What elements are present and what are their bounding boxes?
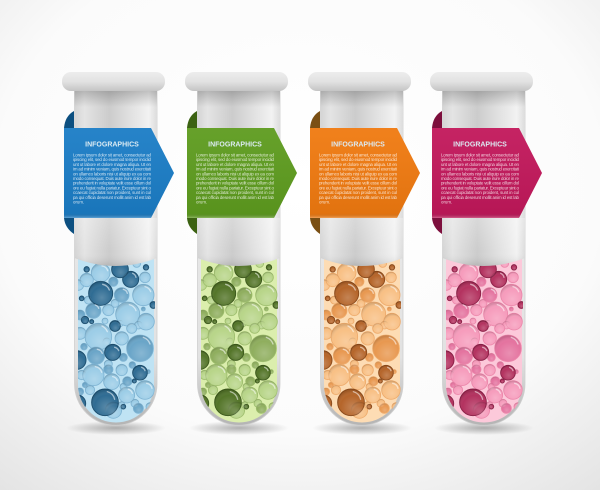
blue ribbon fold — [64, 111, 74, 234]
orange arrow ribbon — [310, 128, 420, 218]
blue body text: prehenderit in voluptate velit esse cillum dol — [73, 181, 151, 186]
panel: blue test tube — [62, 72, 174, 435]
magenta body text: unt ut labore et dolore magna aliqua. Ut en — [441, 162, 520, 167]
magenta body text: on ullamco laboris nisi ut aliquip ex ea com — [441, 171, 519, 176]
blue heading: INFOGRAPHICS — [85, 142, 139, 148]
green body text: im ad minim veniam, quis nostrud exercitati — [196, 167, 274, 172]
orange body text: orum. — [319, 200, 330, 204]
blue arrow ribbon — [64, 128, 174, 218]
orange body text: pa qui officia deserunt mollit anim id est lab — [319, 195, 398, 200]
magenta body text: ore eu fugiat nulla pariatur. Excepteur sint o — [441, 185, 520, 190]
magenta ribbon fold — [432, 111, 442, 234]
orange heading: INFOGRAPHICS — [331, 142, 385, 148]
orange body text: prehenderit in voluptate velit esse cillum dol — [319, 181, 397, 186]
green body text: ore eu fugiat nulla pariatur. Excepteur sint o — [196, 185, 275, 190]
magenta body text: prehenderit in voluptate velit esse cillum dol — [441, 181, 519, 186]
blue body text: im ad minim veniam, quis nostrud exercitati — [73, 167, 151, 172]
green body text: prehenderit in voluptate velit esse cillum dol — [196, 181, 274, 186]
blue body text: modo consequat. Duis aute irure dolor in re — [73, 176, 152, 181]
orange ribbon fold — [310, 111, 320, 234]
magenta body text: ccaecat cupidatat non proident, sunt in cul — [441, 190, 519, 195]
blue body text: pa qui officia deserunt mollit anim id est lab — [73, 195, 152, 200]
orange body text: ipiscing elit, sed do eiusmod tempor incidid — [319, 157, 398, 162]
green body text: modo consequat. Duis aute irure dolor in re — [196, 176, 275, 181]
blue body text: on ullamco laboris nisi ut aliquip ex ea com — [73, 171, 151, 176]
green arrow ribbon — [187, 128, 297, 218]
magenta body text: Lorem ipsum dolor sit amet, consectetur ad — [441, 152, 520, 158]
green body text: ipiscing elit, sed do eiusmod tempor incidid — [196, 157, 275, 162]
orange body text: ore eu fugiat nulla pariatur. Excepteur sint o — [319, 185, 398, 190]
green body text: unt ut labore et dolore magna aliqua. Ut en — [196, 162, 275, 167]
green body text: on ullamco laboris nisi ut aliquip ex ea com — [196, 171, 274, 176]
magenta heading: INFOGRAPHICS — [453, 142, 507, 148]
magenta arrow ribbon — [432, 128, 542, 218]
panel: green test tube — [185, 72, 297, 435]
orange body text: im ad minim veniam, quis nostrud exercitati — [319, 167, 397, 172]
magenta body text: ipiscing elit, sed do eiusmod tempor incidid — [441, 157, 520, 162]
green body text: pa qui officia deserunt mollit anim id est lab — [196, 195, 275, 200]
blue body text: Lorem ipsum dolor sit amet, consectetur ad — [73, 152, 152, 158]
orange tube glass and bubbles — [308, 72, 412, 435]
blue body text: ipiscing elit, sed do eiusmod tempor incidid — [73, 157, 152, 162]
green ribbon fold — [187, 111, 197, 234]
green body text: Lorem ipsum dolor sit amet, consectetur ad — [196, 152, 275, 158]
green tube glass and bubbles — [185, 72, 289, 435]
panel: orange test tube — [308, 72, 420, 435]
blue body text: orum. — [73, 200, 84, 204]
orange body text: unt ut labore et dolore magna aliqua. Ut en — [319, 162, 398, 167]
panel: magenta test tube — [430, 72, 542, 435]
magenta body text: modo consequat. Duis aute irure dolor in re — [441, 176, 520, 181]
magenta tube glass and bubbles — [430, 72, 534, 435]
orange body text: modo consequat. Duis aute irure dolor in re — [319, 176, 398, 181]
green body text: ccaecat cupidatat non proident, sunt in cul — [196, 190, 274, 195]
orange body text: ccaecat cupidatat non proident, sunt in cul — [319, 190, 397, 195]
magenta body text: pa qui officia deserunt mollit anim id est lab — [441, 195, 520, 200]
magenta body text: im ad minim veniam, quis nostrud exercitati — [441, 167, 519, 172]
orange body text: Lorem ipsum dolor sit amet, consectetur ad — [319, 152, 398, 158]
green heading: INFOGRAPHICS — [208, 142, 262, 148]
blue body text: ore eu fugiat nulla pariatur. Excepteur sint o — [73, 185, 152, 190]
orange body text: on ullamco laboris nisi ut aliquip ex ea com — [319, 171, 397, 176]
green body text: orum. — [196, 200, 207, 204]
blue tube glass and bubbles — [62, 72, 166, 435]
blue body text: ccaecat cupidatat non proident, sunt in cul — [73, 190, 151, 195]
magenta body text: orum. — [441, 200, 452, 204]
blue body text: unt ut labore et dolore magna aliqua. Ut en — [73, 162, 152, 167]
